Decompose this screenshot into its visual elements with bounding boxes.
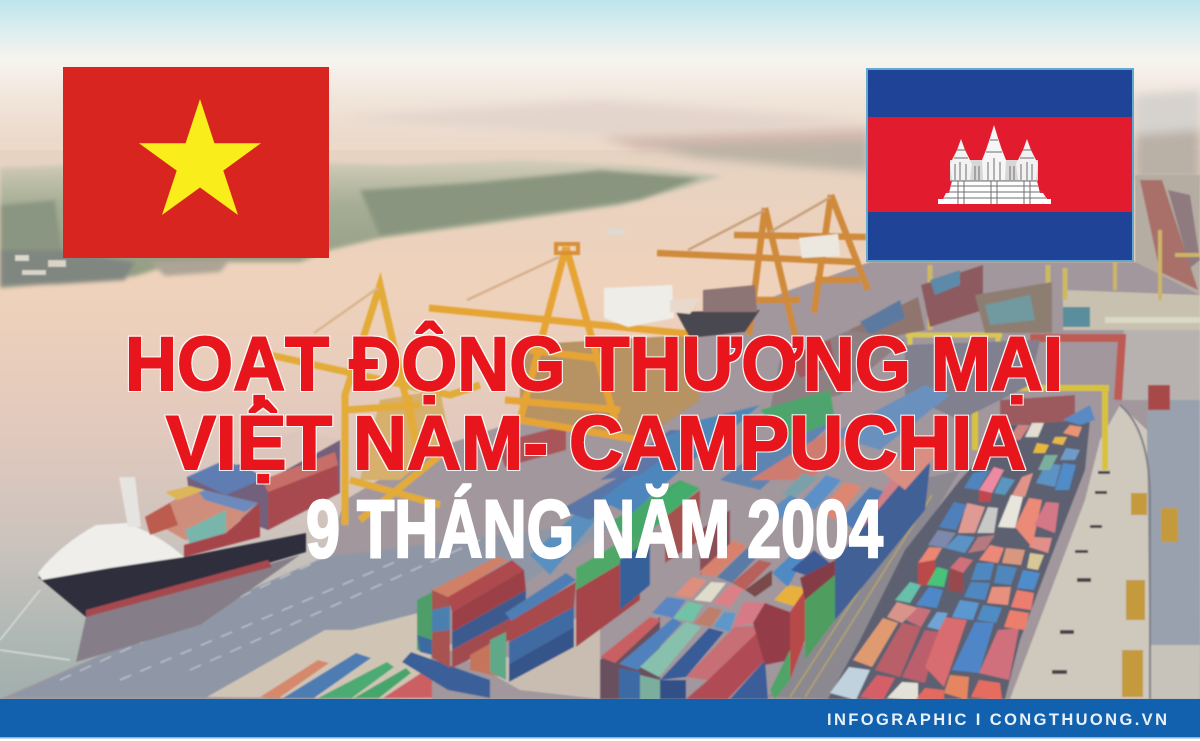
river water: [0, 150, 1200, 710]
yellow yard gantries: [906, 180, 1200, 470]
second vessel behind the cranes: [604, 234, 840, 338]
flag: Vietnam: [63, 67, 329, 258]
container block: mid yard rows under subtitle: [530, 385, 950, 575]
title: two red lines: [125, 322, 1063, 486]
ship cargo containers: [145, 430, 340, 557]
Angkor Wat temple emblem: [938, 125, 1051, 204]
green river bank: [0, 160, 722, 288]
small boat: [608, 229, 624, 235]
container block: lower centre stacks: [417, 530, 650, 682]
crane two: [429, 244, 700, 440]
sky: [0, 0, 1200, 175]
upper yard containers: [770, 265, 1090, 425]
quay slots: [1052, 471, 1110, 674]
container block: right yard tiles: [828, 405, 1095, 700]
flag: Cambodia: [867, 69, 1133, 261]
ship bridge tower: [119, 477, 141, 527]
right concrete quay and road: [1010, 290, 1200, 699]
footer bar: [0, 699, 1200, 738]
title line one: HOẠT ĐỘNG THƯƠNG MẠI: [125, 322, 1063, 407]
crane three: [657, 195, 868, 335]
container ship: [38, 430, 340, 662]
title line two: VIỆT NAM- CAMPUCHIA: [166, 400, 1026, 486]
container block: centre lower rows: [600, 440, 945, 699]
quay road and concrete: [8, 470, 960, 699]
ship hull: [38, 533, 306, 617]
container block: bottom left row: [260, 652, 490, 698]
riverside houses: [15, 255, 66, 275]
cranes: [270, 195, 868, 525]
right far port buildings: [1135, 175, 1200, 300]
crane one: [270, 285, 480, 525]
ship red boot stripe: [86, 560, 272, 617]
port ground: [0, 262, 1200, 699]
hazy sky bands and far shore: [330, 90, 1200, 180]
flag star: [139, 99, 261, 215]
mooring lines: [0, 590, 70, 660]
footer credit: INFOGRAPHIC I CONGTHUONG.VN: [827, 711, 1167, 729]
ship shadow on water: [76, 555, 300, 662]
yard tractors: [1122, 493, 1178, 697]
red truck: [1148, 385, 1170, 410]
ship bow deck: [38, 523, 184, 580]
crane machinery mass: [360, 335, 700, 480]
subtitle: period: 9 THÁNG NĂM 2004: [306, 484, 883, 575]
